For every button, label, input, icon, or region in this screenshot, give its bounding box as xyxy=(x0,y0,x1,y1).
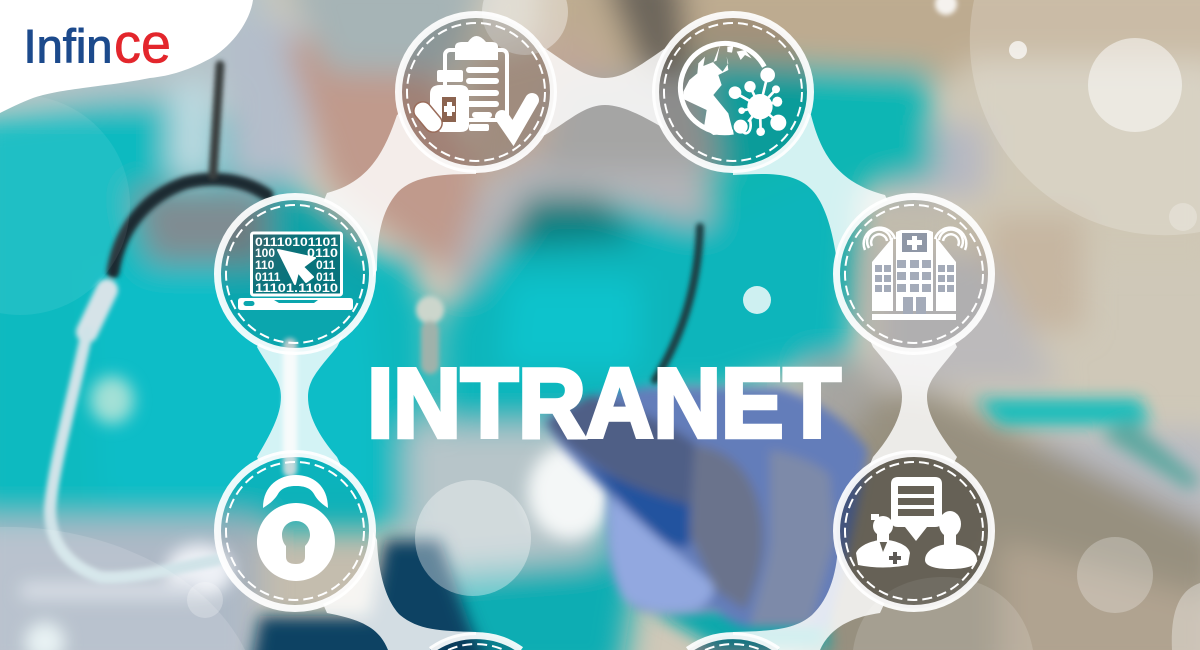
circle: globe with virus xyxy=(656,14,810,170)
circle: medicine clipboard xyxy=(398,14,554,170)
icon: patient xyxy=(925,511,977,569)
circle: hospital building with wireless signal xyxy=(836,196,992,352)
logo: Infince: Infin xyxy=(24,20,112,72)
title: INTRANET: INTRANET xyxy=(367,348,841,458)
icon: globe and virus xyxy=(680,43,786,136)
icon: clipboard with bottle, pill and check xyxy=(410,36,532,136)
icon: padlock xyxy=(257,475,335,581)
logo: Infince: ce xyxy=(114,12,171,74)
logo panel: white curved corner xyxy=(0,0,253,113)
binary text on screen: 011 xyxy=(316,258,336,272)
icon: hospital xyxy=(864,228,966,320)
logo: Infince xyxy=(24,12,171,74)
icon: doctor xyxy=(856,514,910,568)
binary text on screen: 0110 xyxy=(307,246,338,260)
icon: speech bubble xyxy=(891,477,942,541)
icon: laptop xyxy=(238,233,353,310)
circle: padlock security xyxy=(218,454,372,608)
binary text on screen: 11101.11010 xyxy=(255,281,338,295)
binary text on screen xyxy=(255,235,338,295)
icon: mouse cursor xyxy=(278,250,315,284)
binary text on screen: 100 xyxy=(255,246,275,260)
circle: bottom right partial xyxy=(688,636,778,650)
binary text on screen: 110 xyxy=(255,258,275,272)
binary text on screen: 0111 xyxy=(255,270,281,284)
circle: doctor and patient conversation xyxy=(836,454,992,608)
binary text on screen: 011 xyxy=(316,270,336,284)
circle: bottom left partial xyxy=(431,636,521,650)
binary text on screen: 01110101101 xyxy=(255,235,338,249)
connecting network of white translucent links xyxy=(257,45,957,650)
icon: wireless signals xyxy=(864,228,966,250)
circle: laptop with binary code xyxy=(218,196,372,352)
